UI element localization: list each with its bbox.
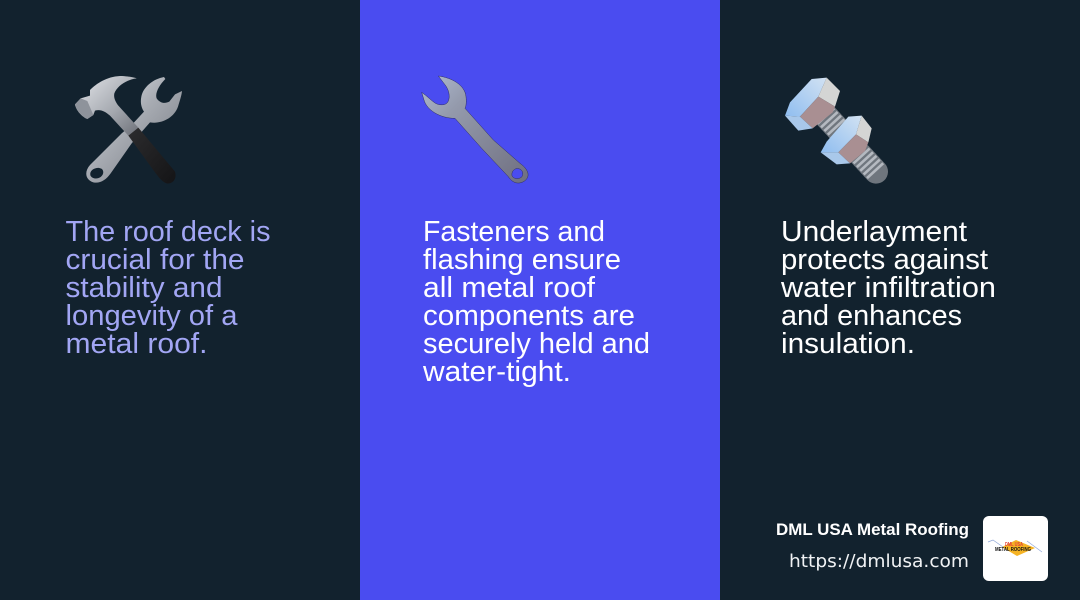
logo: METAL ROOFING bbox=[995, 547, 1031, 553]
panel: centre background bbox=[360, 0, 720, 600]
text block: fasteners and flashing: water-tight. bbox=[422, 356, 571, 388]
text block: fasteners and flashing bbox=[422, 216, 650, 388]
panel: right background bbox=[720, 0, 1080, 600]
logo bbox=[983, 516, 1048, 581]
text block: roof deck: The roof deck is bbox=[66, 216, 270, 248]
icon: wrench bbox=[422, 76, 528, 183]
text block: underlayment: water infiltration bbox=[780, 272, 996, 304]
icon: bolt and nut bbox=[785, 78, 876, 172]
text block: underlayment: and enhances bbox=[781, 300, 962, 332]
text block: roof deck bbox=[66, 216, 270, 360]
company name: DML USA Metal Roofing bbox=[776, 521, 969, 539]
text block: fasteners and flashing: components are bbox=[423, 300, 635, 332]
text block: fasteners and flashing: all metal roof bbox=[423, 272, 595, 304]
text block: roof deck: crucial for the bbox=[66, 244, 245, 276]
panel: left background bbox=[0, 0, 360, 600]
text block: underlayment bbox=[780, 216, 996, 360]
text block: underlayment: insulation. bbox=[781, 328, 915, 360]
logo: DML USA bbox=[1005, 542, 1023, 548]
text block: roof deck: stability and bbox=[66, 272, 222, 304]
icon: hammer and wrench bbox=[75, 76, 182, 183]
text block: fasteners and flashing: Fasteners and bbox=[423, 216, 605, 248]
text block: fasteners and flashing: flashing ensure bbox=[423, 244, 621, 276]
company url: https://dmlusa.com bbox=[789, 551, 969, 572]
text block: underlayment: protects against bbox=[781, 244, 988, 276]
text block: roof deck: metal roof. bbox=[66, 328, 208, 360]
text block: roof deck: longevity of a bbox=[66, 300, 238, 332]
text block: fasteners and flashing: securely held and bbox=[423, 328, 650, 360]
text block: underlayment: Underlayment bbox=[781, 216, 967, 248]
